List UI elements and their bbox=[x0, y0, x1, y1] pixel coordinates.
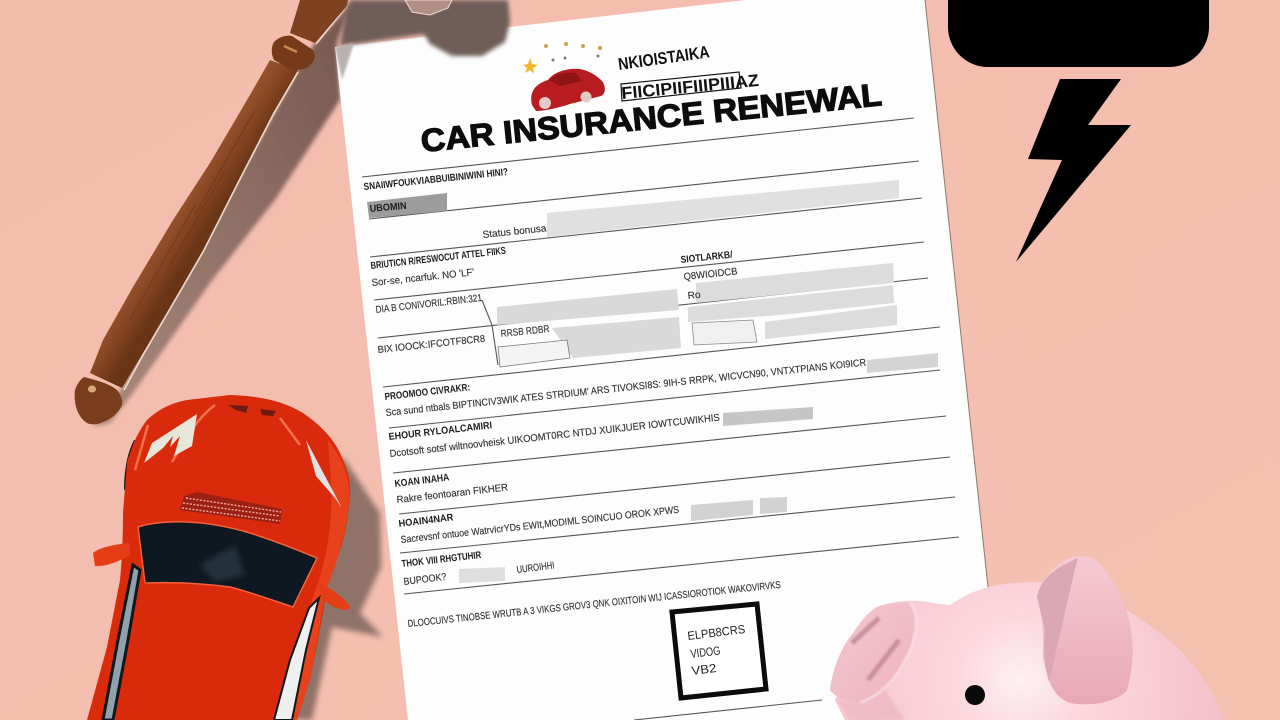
windshield bbox=[138, 522, 317, 607]
stamp box: VB2 bbox=[691, 661, 718, 678]
pig ear bbox=[1037, 556, 1133, 704]
stamp box: ELPB8CRS bbox=[687, 622, 746, 643]
logo text: FIICIPIIFIIIPIIIAZ bbox=[621, 71, 760, 103]
form text: vehicle section: BIX IOOCK:IFCOTF8CR8 bbox=[377, 334, 486, 356]
body highlights bbox=[282, 440, 349, 720]
handle bbox=[90, 60, 298, 388]
form text: coverage sections: Sca sund ntbals BIPTINCIV3WIK ATES STRDIUM' ARS TIVOKSI8S: 9IH-S RRPK, WICVCN90, VNTXTPIANS KOI9ICR bbox=[385, 358, 867, 419]
form text: coverage sections: UUROIHHI bbox=[516, 560, 555, 576]
form text: vehicle section: DIA B CONIVORIL:RBIN:321 bbox=[375, 293, 483, 316]
right mirror bbox=[318, 583, 350, 610]
right side window bbox=[274, 598, 319, 720]
knob bbox=[75, 377, 122, 424]
icon: lightning bolt bbox=[1016, 79, 1131, 262]
pig body bbox=[835, 582, 1225, 720]
collar bbox=[272, 36, 315, 70]
form text: coverage sections: HOAIN4NAR bbox=[398, 512, 455, 530]
icon: black pill shape bbox=[948, 0, 1209, 67]
right headlight bbox=[306, 440, 342, 508]
car body bbox=[87, 395, 350, 720]
title: CAR INSURANCE RENEWAL bbox=[419, 76, 883, 159]
form text: coverage sections: KOAN INAHA bbox=[394, 472, 450, 490]
snout underside bbox=[838, 690, 905, 720]
form text: coverage sections: Dcotsoft sotsf wiltnoovheisk UIKOOMT0RC NTDJ XUIKJUER IOWTCUWIKHIS bbox=[389, 413, 721, 460]
form text: applicant section: SNAIIWFOUKVIABBUIBINIWINI HINI? bbox=[363, 167, 509, 193]
pig eye bbox=[965, 685, 985, 705]
shadow: red car bbox=[280, 457, 383, 720]
form text: vehicle section bbox=[370, 246, 738, 356]
form text: vehicle section: Q8WIOIDCB bbox=[683, 266, 738, 283]
panel: insurance document bbox=[335, 0, 1002, 720]
logo: red car with stars bbox=[523, 42, 605, 111]
gavel bbox=[75, 0, 348, 424]
form text: vehicle section: Sor-se, ncarfuk. NO 'LF' bbox=[371, 267, 475, 289]
front vents bbox=[228, 405, 248, 413]
form text: coverage sections: DLOOCUIVS TINOBSE WRUTB A 3 VIKGS GROV3 QNK OIXITOIN WIJ ICASSIOROTIOK WAKOVIRVKS bbox=[407, 580, 782, 630]
logo text bbox=[617, 42, 760, 103]
paper right edge bbox=[925, 0, 988, 587]
form rules bbox=[362, 118, 959, 720]
form text: coverage sections: Sacrevsnf ontuoe WatrvIcrYDs EWIt,MODIML SOINCUO OROK XPWS bbox=[400, 505, 680, 546]
icon: red toy car bbox=[87, 395, 350, 720]
form text: coverage sections: THOK VIII RHGTUHIR bbox=[401, 550, 482, 570]
form input fields bbox=[367, 180, 938, 583]
logo text: NKIOISTAIKA bbox=[617, 42, 711, 74]
form text: coverage sections bbox=[384, 358, 867, 630]
stamp box: VIDOG bbox=[690, 643, 721, 661]
form text: coverage sections: Rakre feontoaran FIKHER bbox=[396, 482, 509, 506]
grain bbox=[130, 110, 255, 320]
left side window bbox=[103, 565, 140, 720]
form text: coverage sections: PROOMOO CIVRAKR: bbox=[384, 382, 471, 403]
form text: vehicle section: SIOTLARKB/ bbox=[680, 250, 733, 266]
stamp box bbox=[672, 604, 766, 698]
pig snout bbox=[830, 603, 916, 703]
paper sheet bbox=[335, 0, 1002, 720]
form text: applicant section: Status bonusa bbox=[482, 223, 547, 241]
left wheel arch bbox=[124, 440, 138, 490]
shadow across top of paper bbox=[340, 0, 510, 56]
shadow: gavel bbox=[93, 5, 350, 427]
form text: vehicle section: RRSB RDBR bbox=[500, 324, 550, 340]
snout side ridge bbox=[860, 603, 916, 703]
paper corner shade bbox=[335, 43, 354, 80]
highlight rim bbox=[124, 6, 347, 390]
form text: vehicle section: Ro bbox=[687, 290, 702, 302]
icon: piggy bank bbox=[830, 556, 1225, 720]
form text: coverage sections: EHOUR RYLOALCAMIRI bbox=[388, 420, 493, 443]
left headlight bbox=[144, 414, 197, 463]
form text: vehicle section: BRIUTICN R/RESWOCUT ATTEL FIIKS bbox=[370, 246, 507, 272]
left mirror bbox=[93, 543, 130, 566]
hand at top edge bbox=[405, 0, 452, 15]
upper section bbox=[290, 0, 348, 43]
form text: coverage sections: BUPOOK? bbox=[403, 572, 447, 588]
form text: applicant section: UBOMIN bbox=[369, 201, 407, 215]
inner ear bbox=[1037, 558, 1078, 682]
form text: applicant section bbox=[363, 167, 547, 241]
hood grille bbox=[180, 492, 282, 524]
snout nostrils bbox=[852, 618, 899, 680]
